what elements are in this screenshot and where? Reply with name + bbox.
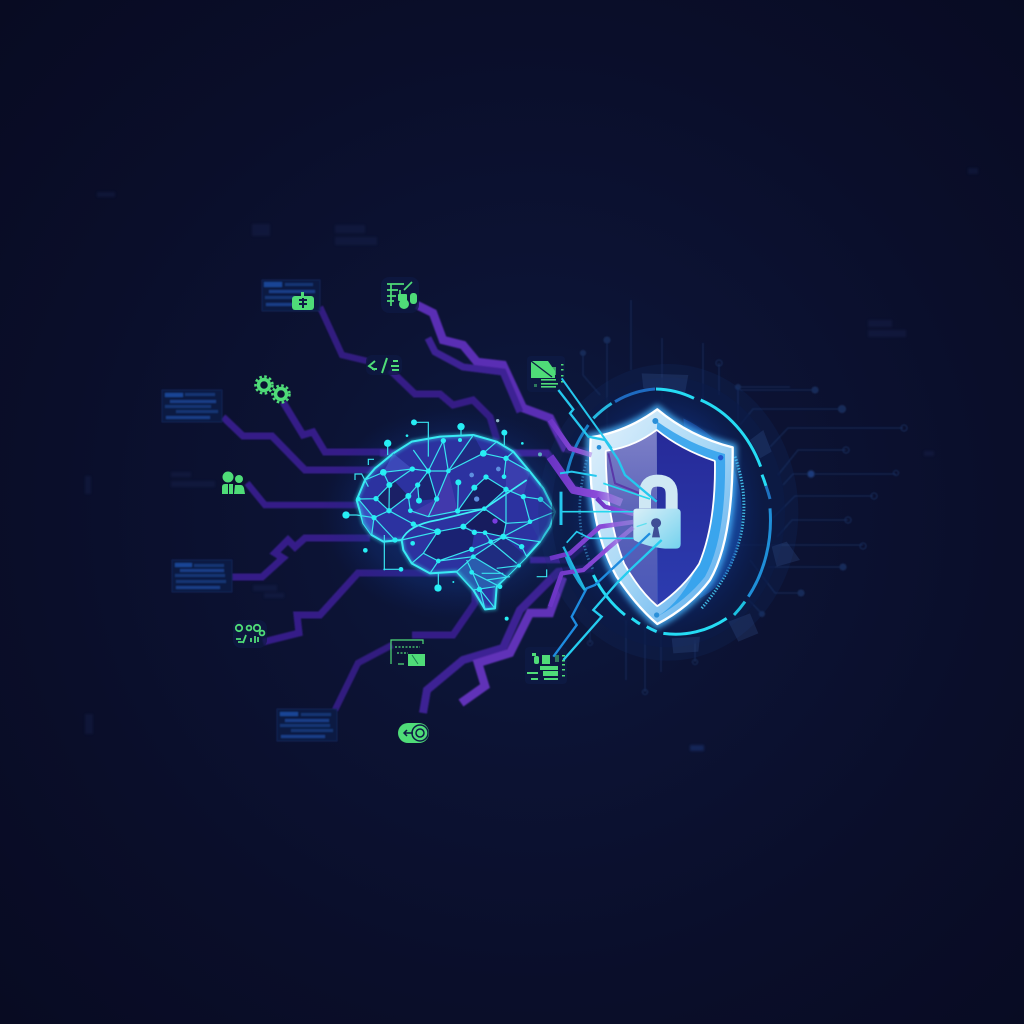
trace: gears bbox=[283, 402, 392, 452]
document panel: top bbox=[262, 280, 320, 311]
padlock bbox=[633, 481, 681, 549]
shield face right half bbox=[657, 431, 714, 605]
icon: gears bbox=[256, 376, 290, 402]
shield back plate bbox=[683, 418, 742, 598]
trace: group icon bbox=[263, 573, 470, 642]
shield right rim tint bbox=[657, 422, 725, 617]
trace: people bbox=[247, 483, 365, 505]
icon: people bbox=[222, 472, 245, 494]
shield assembly bbox=[538, 364, 800, 661]
lock keyhole bbox=[651, 518, 661, 537]
icon: toggle bbox=[398, 723, 429, 743]
document panel: bottom bbox=[277, 709, 337, 741]
shield extrusion glow bbox=[590, 409, 733, 624]
brain outline glow bbox=[357, 435, 555, 609]
icon: code symbols bbox=[366, 355, 402, 375]
brain fold bbox=[402, 480, 527, 540]
shield glow bbox=[565, 383, 765, 637]
icon: chart panel bbox=[391, 640, 425, 666]
trace: upper left document bbox=[320, 307, 367, 361]
lock shackle bbox=[645, 481, 672, 510]
trace: chart icon to brain bbox=[412, 585, 475, 635]
trace: code icon to brain bbox=[390, 370, 497, 440]
faint background marks bbox=[85, 168, 978, 751]
trace: middle to shield bbox=[380, 453, 597, 500]
purple traces entering shield bbox=[550, 420, 633, 607]
lock body bbox=[633, 509, 681, 549]
brain silhouette bbox=[357, 435, 555, 609]
brain glow bbox=[322, 407, 588, 620]
icon: green glyph cluster bbox=[233, 620, 267, 648]
document panels bbox=[162, 280, 337, 741]
trace: top branch bbox=[428, 338, 520, 412]
trace: left document bbox=[223, 417, 380, 470]
icon: chip on document bbox=[292, 292, 314, 310]
brain bbox=[322, 407, 588, 621]
brain nodes bbox=[342, 419, 543, 621]
trace: lower right of brain bbox=[530, 543, 587, 560]
trace: lower left document bbox=[232, 538, 370, 577]
dotted left arc bbox=[580, 460, 593, 570]
trace: bottom document bbox=[335, 645, 392, 710]
icon: screen document bbox=[527, 356, 565, 392]
circuit lines: right of shield bbox=[580, 300, 907, 694]
cyan lightning traces bbox=[553, 378, 662, 660]
shield inner edge bbox=[607, 431, 714, 605]
brain mesh bbox=[346, 422, 555, 609]
icon: circuit and cube bbox=[381, 277, 419, 313]
document panel: lower left bbox=[172, 560, 232, 592]
dotted inner arc bbox=[702, 457, 744, 608]
document panel: left bbox=[162, 390, 222, 422]
dim purple circuit on shield bbox=[608, 453, 657, 500]
green icons bbox=[222, 277, 567, 743]
icon: data panel bbox=[525, 647, 567, 684]
trace: bottom icon to shield bbox=[423, 568, 593, 713]
ring arcs bbox=[565, 389, 770, 634]
brain shading facets bbox=[358, 435, 555, 590]
purple data traces bbox=[223, 305, 600, 713]
shield face left half bbox=[607, 431, 657, 605]
trace: lower bright bolt bbox=[461, 577, 563, 703]
shield rivets bbox=[597, 418, 723, 618]
outer translucent ring bbox=[538, 364, 800, 661]
trace: top icon to shield bbox=[417, 305, 600, 455]
shield rim bbox=[590, 409, 733, 624]
